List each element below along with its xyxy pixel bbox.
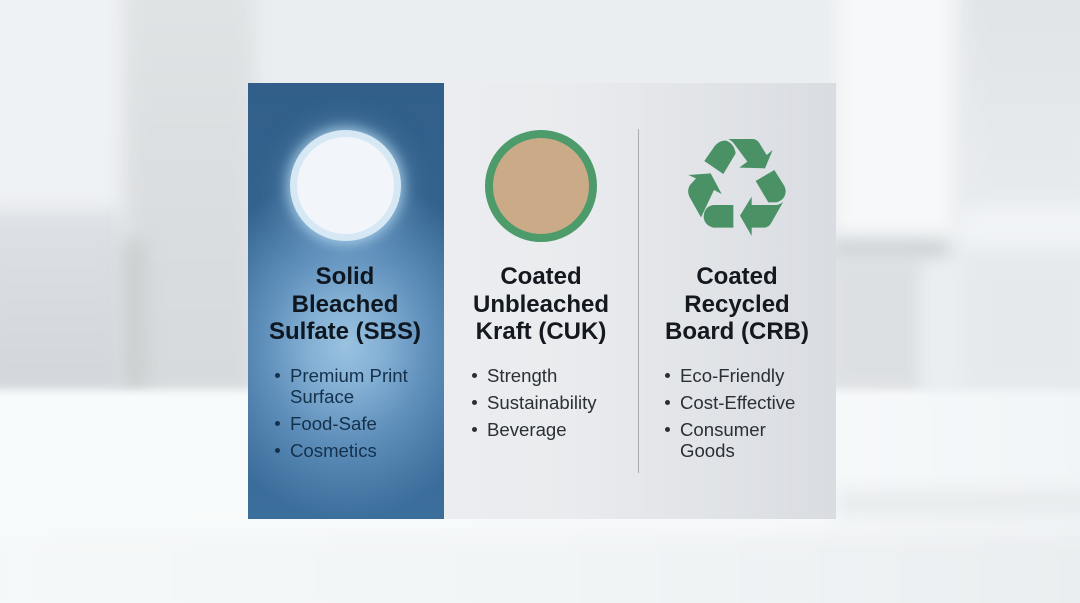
heading: CUK: Kraft (CUK) bbox=[476, 318, 606, 345]
heading: CRB bbox=[665, 263, 809, 345]
list: SBS features: Premium Print bbox=[290, 365, 408, 386]
icon: white glowing circle bbox=[290, 130, 401, 241]
icon: kraft circle with green ring bbox=[485, 130, 597, 242]
heading: CUK bbox=[473, 263, 609, 345]
heading: CRB: Recycled bbox=[684, 290, 790, 318]
list: CRB features: Consumer bbox=[680, 419, 766, 440]
icon: recycling symbol bbox=[688, 139, 786, 236]
heading: CUK: Unbleached bbox=[473, 290, 609, 318]
heading: SBS: Bleached bbox=[292, 290, 398, 318]
list: CRB features: Cost-Effective bbox=[680, 392, 795, 413]
heading: CUK: Coated bbox=[500, 263, 582, 290]
divider line bbox=[638, 129, 639, 473]
list: SBS features: Surface bbox=[290, 386, 354, 407]
list: SBS features: Cosmetics bbox=[290, 440, 377, 461]
list: SBS features bbox=[275, 365, 408, 461]
heading: CRB: Board (CRB) bbox=[665, 318, 809, 345]
poster card bbox=[248, 83, 836, 519]
list: SBS features: Food-Safe bbox=[290, 413, 377, 434]
list: CRB features bbox=[665, 365, 795, 461]
heading: SBS: Solid bbox=[316, 263, 374, 290]
heading: SBS bbox=[269, 263, 421, 345]
list: CRB features: Eco-Friendly bbox=[680, 365, 784, 386]
list: CUK features: Beverage bbox=[487, 419, 567, 440]
list: CUK features bbox=[472, 365, 597, 440]
heading: CRB: Coated bbox=[696, 263, 778, 290]
heading: SBS: Sulfate (SBS) bbox=[269, 318, 421, 345]
list: CUK features: Sustainability bbox=[487, 392, 597, 413]
panel: SBS blue column bbox=[248, 83, 444, 519]
list: CRB features: Goods bbox=[680, 440, 735, 461]
list: CUK features: Strength bbox=[487, 365, 557, 386]
